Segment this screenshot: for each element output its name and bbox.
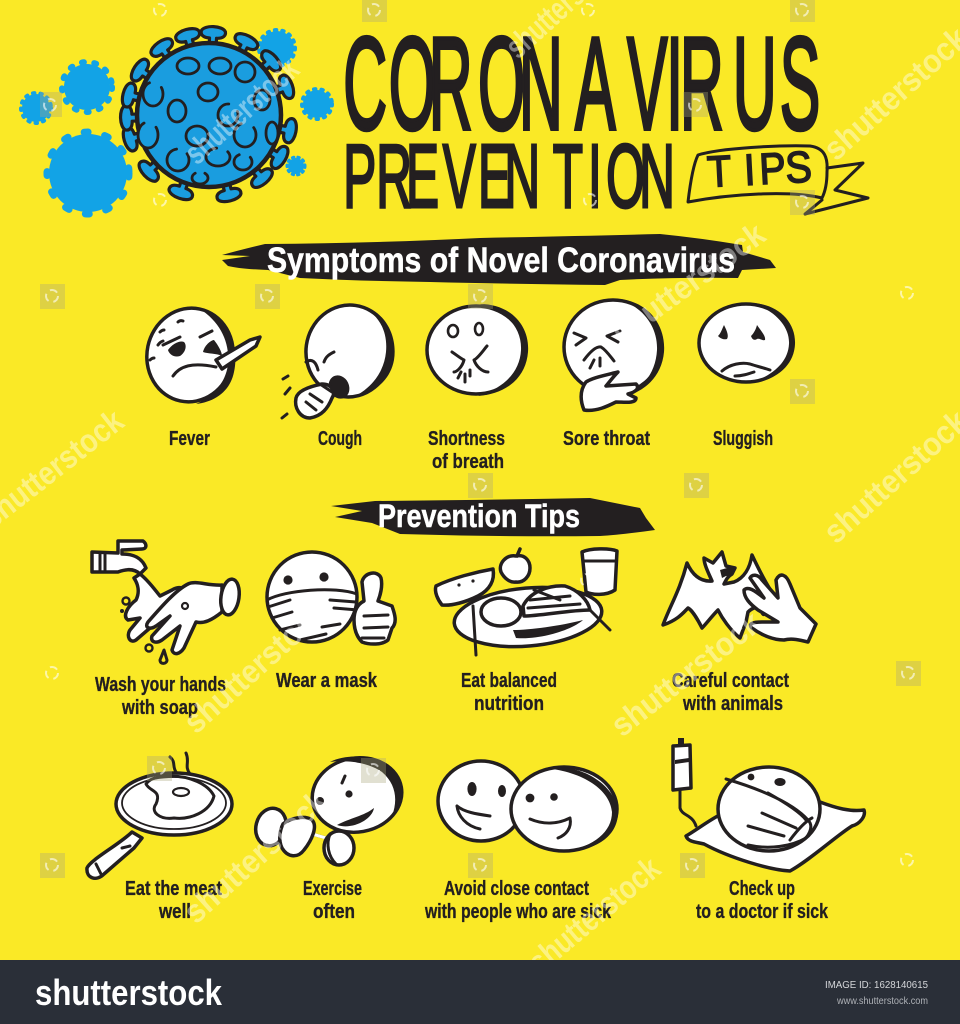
icon: bat and hand	[663, 552, 816, 642]
label: eat the meat well: well	[158, 901, 191, 923]
label: avoid close contact	[424, 878, 612, 923]
tips ribbon	[688, 142, 868, 214]
melon slice	[435, 569, 493, 605]
label: fever: Fever	[169, 428, 210, 450]
left hand	[126, 574, 185, 641]
label: careful contact with animals	[672, 670, 789, 715]
label: check up: to a doctor if sick	[696, 901, 829, 923]
icon: frying pan	[87, 753, 232, 878]
footer image id: IMAGE ID: 1628140615	[825, 980, 928, 991]
icon: sluggish face	[699, 303, 795, 383]
label: wear a mask: Wear a mask	[276, 670, 378, 692]
label: avoid close contact: Avoid close contact	[444, 878, 589, 900]
icon: exercise	[252, 751, 408, 865]
label: wash your hands: with soap	[121, 697, 198, 719]
title	[343, 10, 868, 227]
watermark overlay: shutterstock	[521, 849, 667, 980]
label: shortness of breath: Shortness	[428, 428, 505, 450]
hand	[744, 575, 816, 642]
label: exercise often	[303, 878, 362, 923]
iv drip	[673, 745, 691, 790]
main coronavirus	[120, 26, 298, 204]
heading banner: prevention tips: Prevention Tips	[378, 498, 580, 534]
label: careful contact with animals: with animals	[682, 693, 783, 715]
watermark overlay: shutterstock	[604, 215, 772, 351]
tap	[92, 541, 146, 574]
icon: balanced meal	[435, 549, 617, 655]
label: shortness of breath: of breath	[432, 451, 504, 473]
heading banner: symptoms	[222, 234, 776, 285]
label: careful contact with animals: Careful contact	[672, 670, 789, 692]
watermark overlay: shutterstock	[177, 50, 306, 171]
panel: prevention tips	[87, 498, 864, 923]
title line: Coronavirus: CORONAVIRUS	[343, 10, 820, 157]
label: eat balanced nutrition: Eat balanced	[461, 670, 557, 692]
label: exercise often: Exercise	[303, 878, 362, 900]
panel: symptoms	[138, 234, 795, 473]
label: sluggish: Sluggish	[713, 428, 773, 450]
icon: fever face	[138, 300, 260, 410]
footer url: www.shutterstock.com	[836, 996, 928, 1007]
small blue viruses	[21, 30, 332, 214]
virus illustration	[21, 26, 332, 214]
title line: Prevention: PREVENTION	[343, 126, 675, 227]
label: eat the meat well: Eat the meat	[125, 878, 222, 900]
icon: shortness of breath face	[427, 304, 528, 396]
label: exercise often: often	[313, 901, 355, 923]
icon: two faces avoiding contact	[438, 761, 618, 852]
watermark overlay: shutterstock	[604, 603, 769, 744]
apple	[500, 549, 530, 582]
label: eat balanced nutrition	[461, 670, 557, 715]
label: cough: Cough	[318, 428, 362, 450]
watermark overlay: shutterstock	[176, 592, 335, 740]
label: eat balanced nutrition: nutrition	[474, 693, 544, 715]
icon: patient in bed	[673, 738, 864, 871]
label: avoid close contact: with people who are sick	[424, 901, 612, 923]
label: shortness of breath	[428, 428, 505, 473]
pillow	[686, 802, 864, 871]
heading banner: symptoms: Symptoms of Novel Coronavirus	[267, 241, 735, 280]
label: check up: Check up	[729, 878, 795, 900]
label: wash your hands	[95, 674, 226, 719]
icon: mask and thumbs up	[267, 552, 395, 644]
icon: cough face	[282, 299, 398, 418]
right hand	[147, 583, 222, 654]
footer logo: shutterstock	[35, 972, 223, 1013]
label: wash your hands: Wash your hands	[95, 674, 226, 696]
heading banner: prevention tips	[331, 498, 655, 536]
label: check up	[696, 878, 829, 923]
head with mask	[718, 767, 820, 851]
bat	[663, 552, 778, 638]
icon: sore throat face	[564, 299, 664, 410]
label: sore throat: Sore throat	[563, 428, 650, 450]
tips ribbon: TIPS	[706, 142, 813, 196]
plate	[452, 582, 604, 652]
watermark overlay: shutterstock	[176, 782, 335, 930]
footer bar	[0, 960, 960, 1024]
label: eat the meat well	[125, 878, 222, 923]
glass	[582, 549, 617, 594]
icon: wash hands	[92, 541, 241, 663]
